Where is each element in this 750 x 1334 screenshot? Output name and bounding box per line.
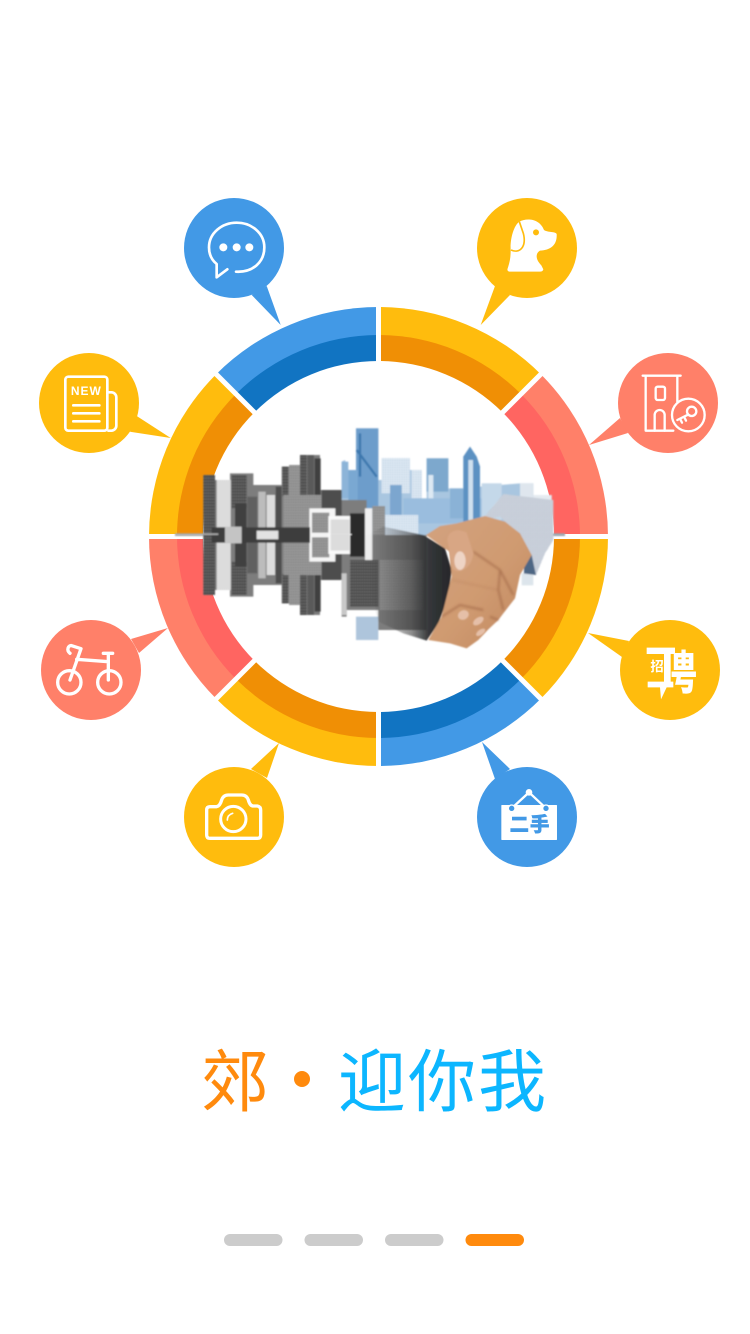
ring: eight-segment circle <box>142 300 615 773</box>
inner band: upper right red <box>378 394 580 536</box>
icon: newspaper NEW: NEW <box>71 384 102 398</box>
icon: recruit character: 甹 <box>670 648 697 700</box>
callout: second-hand sign <box>477 742 577 867</box>
segment: bottom right blue <box>378 536 541 766</box>
icon: recruit character <box>647 648 697 700</box>
hand shading <box>442 552 513 620</box>
inner band: top left dark blue <box>236 335 378 536</box>
inner band: upper left orange <box>177 394 378 536</box>
segment: top right yellow <box>378 307 541 536</box>
inner band: lower right orange <box>378 536 580 679</box>
segment: lower left coral <box>149 536 378 699</box>
inner band: bottom left orange <box>236 536 378 738</box>
segment: bottom left yellow <box>216 536 378 766</box>
icon: dog <box>507 220 557 272</box>
dark suit sleeve <box>370 527 452 641</box>
segment: lower right yellow <box>378 536 608 699</box>
inner band: lower left red <box>177 536 378 679</box>
icon: building and key <box>643 376 705 431</box>
title <box>201 1045 548 1121</box>
icon: camera <box>207 795 261 838</box>
icon: bicycle <box>58 646 121 694</box>
callout: dog <box>477 198 577 325</box>
central photo: city skyline and handshake <box>175 428 565 648</box>
striped shirt sleeve <box>482 494 553 575</box>
callout: housing key <box>589 353 718 453</box>
callout: newspaper <box>39 353 171 453</box>
callout: bicycle <box>41 620 168 720</box>
callout: camera <box>184 743 284 867</box>
segment: upper left yellow <box>149 374 378 536</box>
blue skyline <box>342 428 565 640</box>
segment: top left blue <box>216 307 378 536</box>
icon: hanging sign: 二手 <box>510 813 550 836</box>
pagination dots <box>224 1234 524 1246</box>
title: 迎你我 <box>338 1045 548 1121</box>
inner band: top right orange <box>378 335 521 536</box>
inner band: bottom right dark blue <box>378 536 521 738</box>
title: 郊 <box>201 1045 269 1121</box>
grey skyline, upper half <box>175 455 418 536</box>
icon: recruit character: 招 <box>650 658 664 674</box>
callout: recruitment <box>588 620 720 720</box>
hands <box>426 516 532 648</box>
segment: upper right coral <box>378 374 608 536</box>
grey skyline, lower mirrored half <box>203 534 427 630</box>
callout: chat <box>184 198 284 325</box>
icon: speech bubble <box>209 223 264 277</box>
